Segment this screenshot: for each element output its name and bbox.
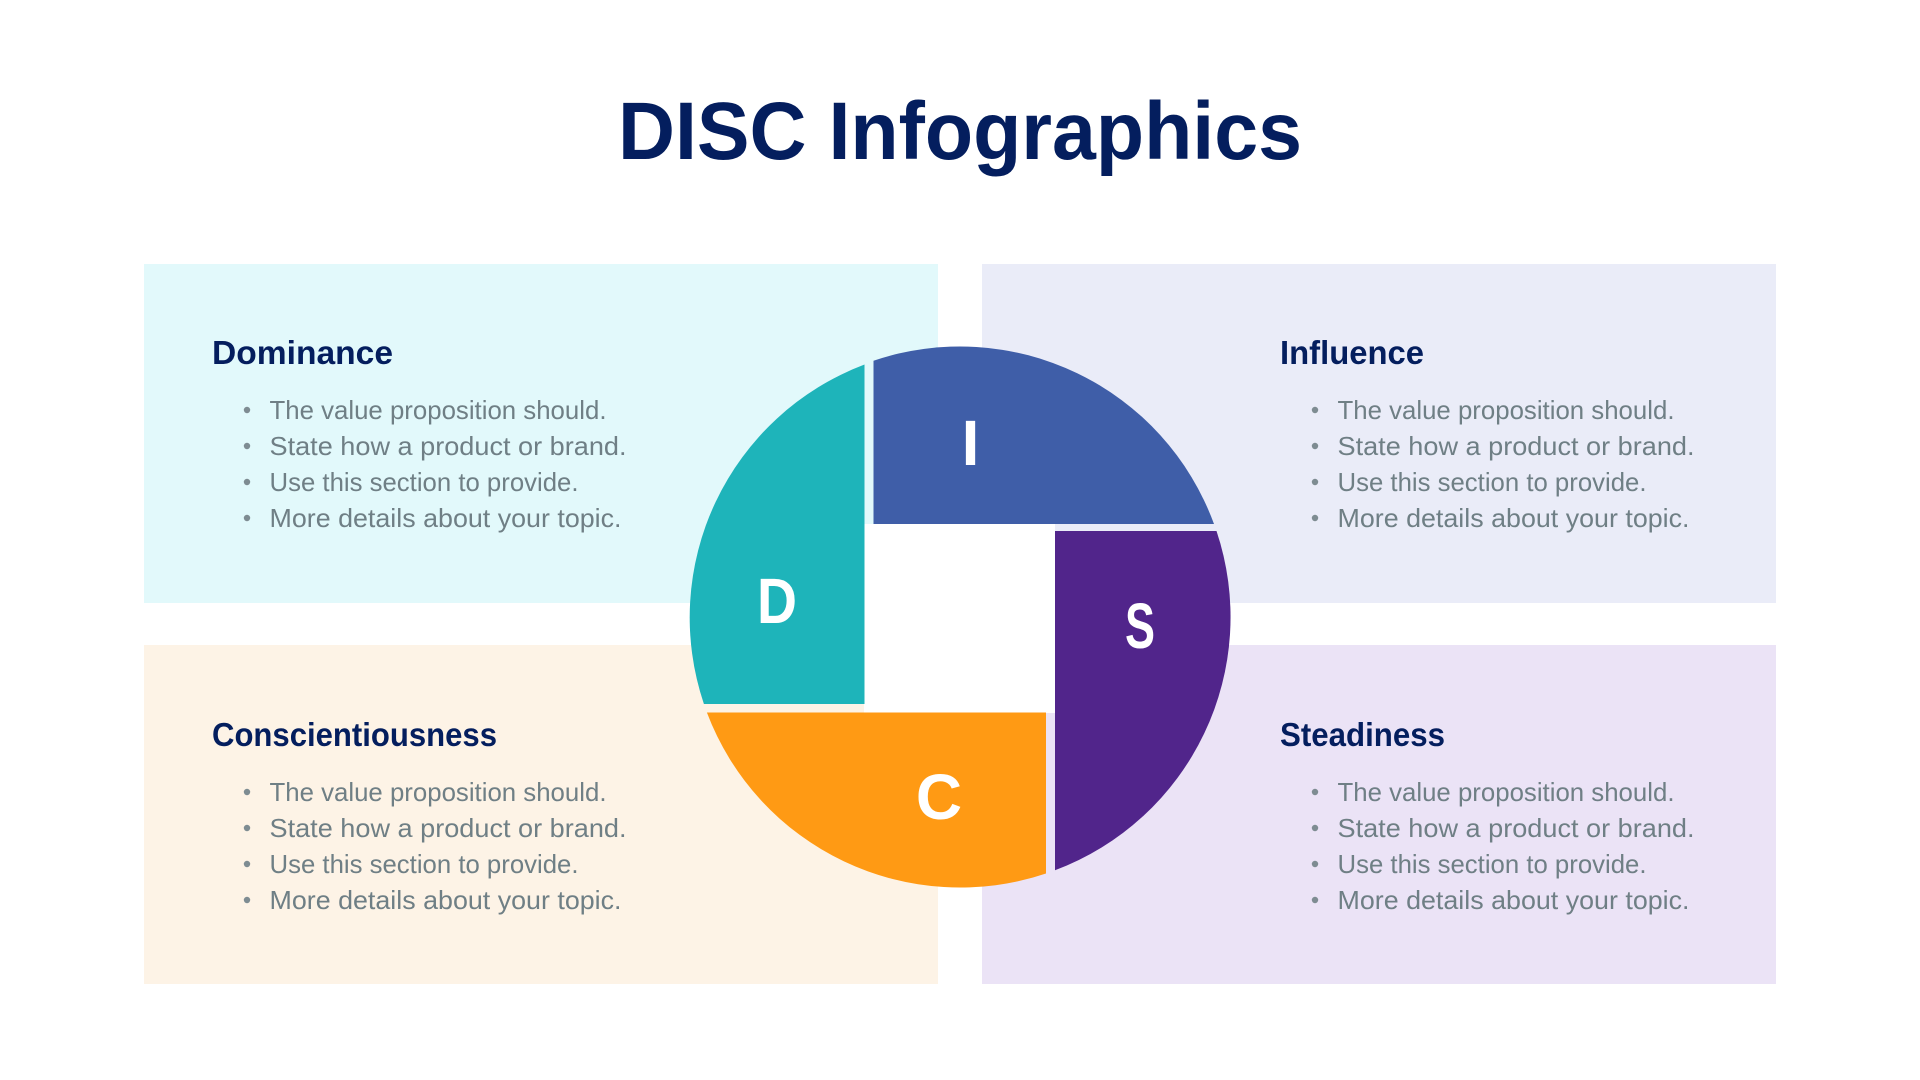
bullet list: steadiness: Use this section to provide. <box>1338 849 1646 879</box>
bullet list: dominance: More details about your topic. <box>270 503 622 533</box>
bullet list: influence: More details about your topic. <box>1338 503 1690 533</box>
bullet list: conscientiousness <box>244 777 627 915</box>
panel: steadiness <box>982 645 1776 984</box>
bullet list: steadiness <box>1312 777 1694 915</box>
bullet list: steadiness: The value proposition should. <box>1338 777 1674 807</box>
bullet list: influence <box>1312 395 1694 533</box>
bullet list: dominance: The value proposition should. <box>270 395 606 425</box>
segment: I <box>874 347 1214 524</box>
panel: conscientiousness <box>144 645 938 984</box>
segment: C: C <box>916 761 962 833</box>
bullet list: conscientiousness: The value proposition should. <box>270 777 606 807</box>
bullet list: conscientiousness: More details about your topic. <box>270 885 622 915</box>
bullet list: steadiness: State how a product or brand. <box>1338 813 1694 843</box>
segment: D <box>690 364 864 704</box>
title: DISC Infographics <box>618 86 1302 177</box>
bullet list: influence: State how a product or brand. <box>1338 431 1694 461</box>
bullet list: conscientiousness: Use this section to provide. <box>270 849 578 879</box>
heading: steadiness: Steadiness <box>1280 716 1445 753</box>
DISC circle chart <box>690 347 1231 888</box>
heading: conscientiousness: Conscientiousness <box>212 716 497 753</box>
bullet list: dominance: State how a product or brand. <box>270 431 626 461</box>
bullet list: influence: Use this section to provide. <box>1338 467 1646 497</box>
bullet list: conscientiousness: State how a product or brand. <box>270 813 626 843</box>
segment: I: I <box>962 407 979 479</box>
bullet list: influence: The value proposition should. <box>1338 395 1674 425</box>
heading: influence: Influence <box>1280 334 1424 371</box>
panel: dominance <box>144 264 938 603</box>
center square <box>864 524 1055 713</box>
segment: S: S <box>1125 590 1155 662</box>
segment: D: D <box>757 565 797 637</box>
bullet list: dominance <box>244 395 627 533</box>
segment: S <box>1055 531 1231 870</box>
heading: dominance: Dominance <box>212 334 393 371</box>
segment: C <box>707 712 1046 888</box>
bullet list: dominance: Use this section to provide. <box>270 467 578 497</box>
bullet list: steadiness: More details about your topic. <box>1338 885 1690 915</box>
panel: influence <box>982 264 1776 603</box>
